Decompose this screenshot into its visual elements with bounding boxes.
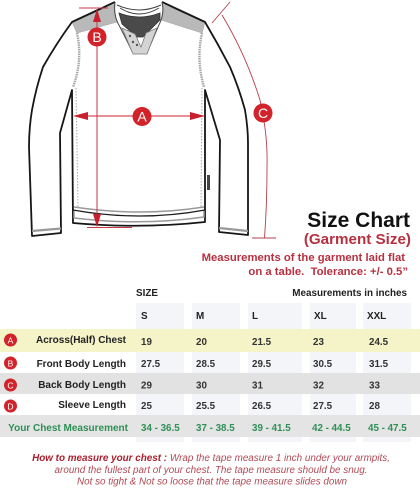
table: chest values: 45 - 47.5: [368, 423, 407, 434]
shirt: shoulder yokes: [72, 4, 205, 33]
table: values: 27.5: [313, 401, 333, 412]
table: header labels: [136, 288, 408, 322]
table: chest values: 37 - 38.5: [196, 423, 235, 434]
note: measurement tolerance: on a table. Tolerance: +/- 0.5”: [248, 266, 408, 278]
shirt: cuffs: [32, 228, 248, 231]
table: values: 30.5: [313, 359, 333, 370]
note: how to measure your chest: [32, 453, 390, 488]
illustration: long sleeve henley shirt: [29, 2, 248, 236]
table: row badges: B: [8, 358, 14, 368]
shirt: armhole seams: [73, 33, 204, 87]
table: chest values: [141, 423, 407, 434]
note: measurement tolerance: Measurements of the garment laid flat: [202, 252, 405, 264]
table: row badges: A: [8, 336, 14, 346]
table: values: 21.5: [252, 337, 272, 348]
table: values: 29: [141, 380, 152, 392]
note: how to measure your chest: How to measure your chest : Wrap the tape measure 1 inch under your armpits,: [32, 453, 390, 464]
table: values: 23: [313, 337, 324, 348]
table: chest values: 34 - 36.5: [141, 423, 180, 434]
table: header labels: Measurements in inches: [292, 288, 408, 299]
table: values: 20: [196, 337, 207, 348]
table: values: [141, 337, 389, 412]
measurement C: sleeve arc: C: [258, 105, 268, 121]
shirt: side seams: [76, 88, 202, 208]
table: row badges: [4, 334, 17, 412]
heading: garment size: (Garment Size): [304, 231, 411, 248]
measurement B: body length arrow: [79, 8, 132, 228]
table: header labels: XL: [314, 311, 327, 322]
table: header labels: SIZE: [136, 288, 158, 299]
table: values: 25.5: [196, 401, 216, 412]
table: column backgrounds: [136, 303, 411, 442]
table: values: 26.5: [252, 401, 272, 412]
table: chest row band: [0, 415, 420, 437]
table: header labels: S: [141, 311, 148, 322]
table: values: 29.5: [252, 359, 272, 370]
table: row A band: [0, 329, 420, 352]
table: values: 27.5: [141, 359, 161, 370]
table: size chart: [0, 288, 420, 442]
shirt: placket: [122, 28, 157, 54]
note: how to measure your chest: around the fullest part of your chest. The tape measure should be snug.: [55, 465, 367, 476]
table: values: 31.5: [369, 359, 389, 370]
table: row labels: Sleeve Length: [58, 400, 126, 411]
shirt: lower hem line: [73, 210, 205, 216]
table: header labels: L: [252, 311, 258, 322]
table: row labels: [36, 335, 127, 411]
note: measurement tolerance: [202, 252, 408, 278]
heading: size chart: Size Chart: [307, 209, 410, 232]
table: row labels: Across(Half) Chest: [36, 335, 127, 346]
note: how to measure your chest: Not so tight & Not so loose that the tape measure slides down: [77, 476, 348, 488]
table: chest row label: Your Chest Measurement: [8, 423, 129, 434]
table: values: 24.5: [369, 337, 389, 348]
table: row badges: D: [7, 402, 14, 412]
table: row labels: Front Body Length: [37, 359, 126, 370]
table: chest values: 39 - 41.5: [252, 423, 291, 434]
table: row C band: [0, 373, 420, 394]
table: values: 28.5: [196, 359, 216, 370]
table: row badges: C: [7, 380, 14, 390]
table: header labels: XXL: [367, 311, 386, 322]
table: values: 25: [141, 401, 152, 412]
shirt: neckline: [115, 2, 163, 53]
table: values: 32: [313, 380, 324, 392]
shirt: hem: [74, 207, 204, 222]
shirt: buttons: [129, 35, 138, 46]
table: values: 31: [252, 380, 263, 392]
table: row labels: Back Body Length: [38, 380, 126, 391]
measurement A: chest arrow: A: [137, 108, 147, 124]
shirt: outline: [29, 2, 248, 236]
table: chest values: 42 - 44.5: [312, 423, 351, 434]
measurement A: chest arrow: [73, 107, 205, 126]
table: values: 28: [369, 401, 380, 412]
table: values: 30: [196, 380, 207, 392]
table: header labels: M: [196, 311, 204, 322]
shirt: inner collar: [119, 13, 160, 37]
measurement C: sleeve arc: [212, 2, 276, 238]
table: values: 19: [141, 337, 152, 348]
table: values: 33: [369, 380, 380, 392]
shirt: side label: [207, 175, 210, 190]
measurement B: body length arrow: B: [92, 29, 102, 45]
